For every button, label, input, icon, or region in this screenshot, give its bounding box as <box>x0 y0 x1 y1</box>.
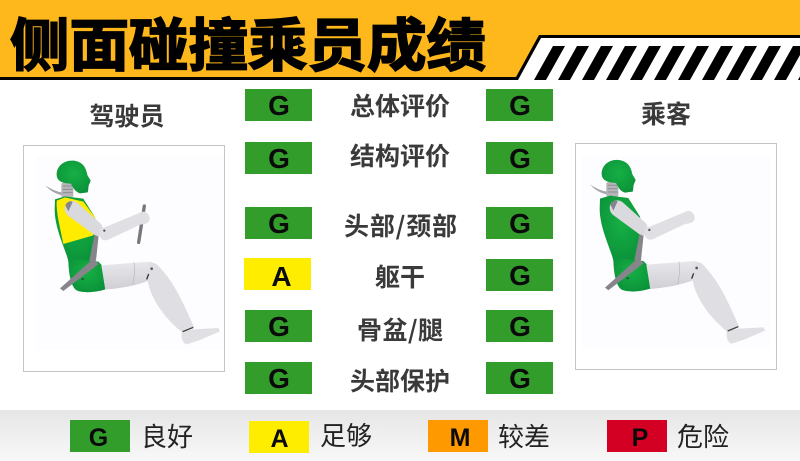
row: head and neck <box>245 207 553 243</box>
row: structure rating <box>245 137 553 174</box>
row: pelvis and leg <box>245 310 553 347</box>
legend item: poor: 危险 <box>677 417 729 454</box>
row: pelvis and leg: G <box>509 311 531 342</box>
row: structure rating: G <box>268 143 290 174</box>
row: torso: A <box>271 261 292 292</box>
legend item: adequate: A <box>270 425 289 453</box>
row: head and neck: G <box>268 208 290 239</box>
row: head and neck: G <box>509 208 531 239</box>
heading: passenger: 乘客 <box>641 95 691 131</box>
row: head and neck: 头部/颈部 <box>344 207 457 243</box>
row: structure rating: G <box>509 143 531 174</box>
row: head protection: G <box>509 363 531 394</box>
legend item: marginal: M <box>450 424 470 452</box>
legend item: adequate: 足够 <box>320 416 372 453</box>
row: head protection: G <box>268 363 290 394</box>
legend item: good: G <box>89 424 108 452</box>
legend item: good: 良好 <box>141 417 193 454</box>
hazard stripes <box>534 46 800 80</box>
panel: driver dummy <box>24 146 224 372</box>
figure: driver dummy <box>45 161 220 344</box>
legend item: marginal: 较差 <box>498 417 550 454</box>
title: 侧面碰撞乘员成绩 <box>10 0 486 82</box>
figure: passenger dummy <box>590 160 765 344</box>
row: overall rating: 总体评价 <box>350 87 450 123</box>
row: torso: 躯干 <box>375 258 425 294</box>
legend item: poor <box>607 417 729 454</box>
legend item: marginal <box>428 417 550 454</box>
row: overall rating <box>245 87 553 123</box>
row: pelvis and leg: G <box>268 311 290 342</box>
header banner <box>0 0 800 80</box>
row: overall rating: G <box>268 90 290 121</box>
row: head protection <box>245 362 553 398</box>
legend item: poor: P <box>632 424 648 452</box>
row: structure rating: 结构评价 <box>350 137 450 173</box>
row: torso <box>244 258 553 294</box>
heading: driver: 驾驶员 <box>89 97 165 133</box>
row: overall rating: G <box>509 90 531 121</box>
row: torso: G <box>509 260 531 291</box>
legend item: good <box>70 417 193 454</box>
row: pelvis and leg: 骨盆/腿 <box>357 311 443 347</box>
row: head protection: 头部保护 <box>350 362 450 398</box>
panel: passenger dummy <box>576 144 776 370</box>
legend <box>0 410 800 461</box>
legend item: adequate <box>249 416 372 453</box>
